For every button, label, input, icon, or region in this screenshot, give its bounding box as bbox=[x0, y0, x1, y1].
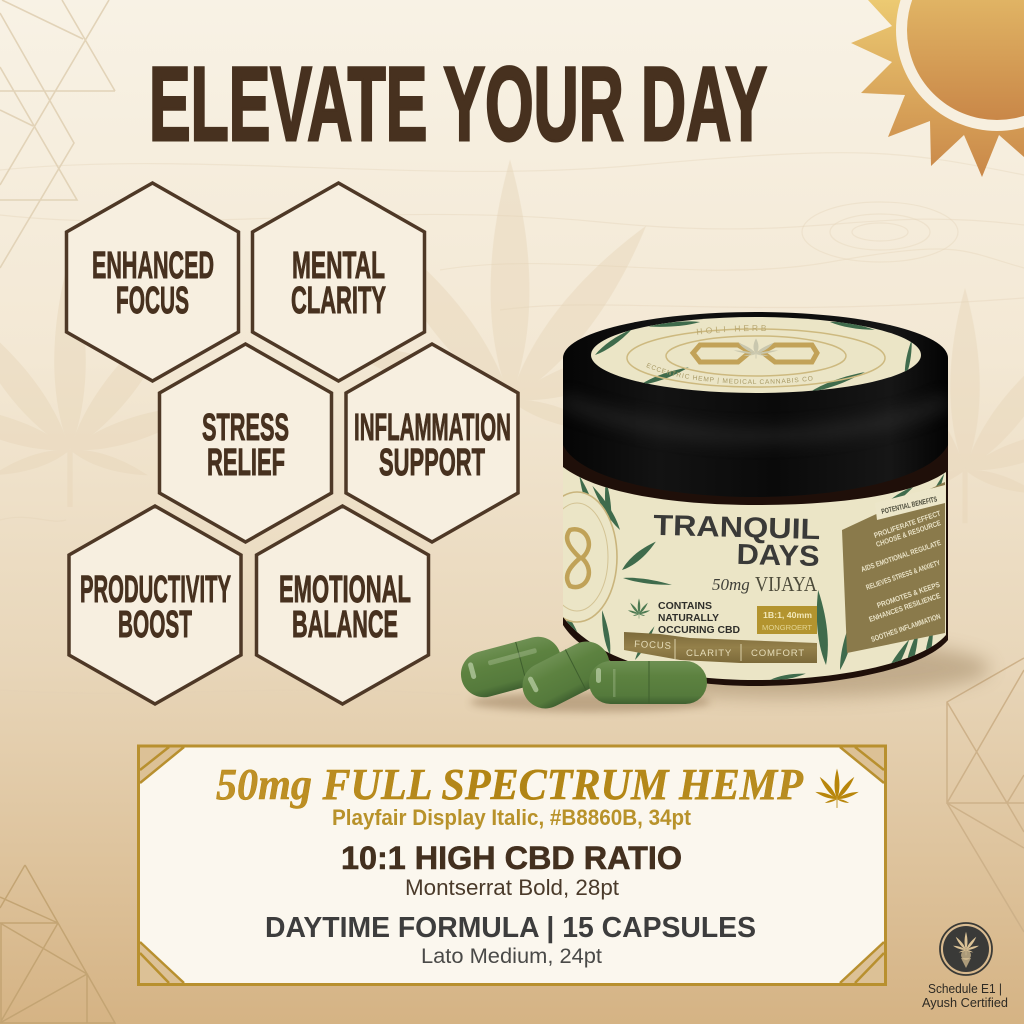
capsule 1 bbox=[456, 632, 566, 702]
jar shadow bbox=[570, 638, 990, 698]
cbd note: OCCURING CBD bbox=[658, 625, 740, 636]
jar label bbox=[559, 467, 947, 692]
cbd note bbox=[628, 598, 740, 636]
geometric lines: top left bbox=[0, 0, 115, 268]
strength line: 50mg bbox=[712, 575, 750, 594]
ratio line: 10:1 HIGH CBD RATIO bbox=[341, 840, 682, 876]
capsule 2 bbox=[515, 634, 617, 716]
geometric lines: bottom left bbox=[0, 865, 115, 1023]
jar glass body bbox=[563, 445, 948, 686]
hexagon: productivity boost: BOOST bbox=[118, 604, 192, 646]
panel frame bbox=[138, 746, 886, 984]
hexagon: stress relief bbox=[160, 344, 332, 542]
icon: gold hemp leaf bbox=[815, 768, 859, 808]
gold ratio box bbox=[757, 606, 817, 634]
formula line: DAYTIME FORMULA | 15 CAPSULES bbox=[265, 912, 756, 944]
certification badge: Schedule E1 | bbox=[928, 982, 1002, 996]
hexagon: inflammation support: SUPPORT bbox=[379, 442, 485, 484]
certification badge bbox=[922, 923, 1008, 1010]
product name: TRANQUIL bbox=[653, 510, 821, 546]
product jar bbox=[563, 312, 948, 686]
hexagon: emotional balance: BALANCE bbox=[292, 604, 398, 646]
hexagon: stress relief: RELIEF bbox=[207, 442, 285, 484]
potential benefits panel: PROMOTES & KEEPS bbox=[876, 580, 941, 610]
label seal bbox=[563, 491, 618, 623]
hexagon: emotional balance bbox=[256, 506, 428, 704]
capsule 3 bbox=[589, 661, 707, 704]
hexagon: productivity boost bbox=[69, 506, 241, 704]
caption: ratio font: Montserrat Bold, 28pt bbox=[405, 875, 619, 900]
potential benefits panel: PROLIFERATE EFFECT bbox=[873, 508, 942, 540]
icon: sun bbox=[851, 0, 1024, 177]
hexagon: inflammation support: INFLAMMATION bbox=[354, 407, 511, 449]
product name bbox=[652, 510, 821, 573]
potential benefits panel: ENHANCES RESILIENCE bbox=[868, 591, 942, 624]
potential benefits panel: RELIEVES STRESS & ANXIETY bbox=[865, 558, 941, 592]
potential benefits panel bbox=[842, 482, 945, 653]
potential benefits panel: AIDS EMOTIONAL REGULATE bbox=[860, 538, 942, 574]
lid seal: ECCENTRIC HEMP | MEDICAL CANNABIS CO bbox=[646, 362, 812, 384]
caption: formula font: Lato Medium, 24pt bbox=[421, 945, 602, 968]
caption: headline font: Playfair Display Italic, #B8860B, 34pt bbox=[332, 805, 692, 830]
geometric lines: right bbox=[947, 658, 1024, 932]
strength line: VIJAYA bbox=[755, 572, 818, 596]
hexagon: mental clarity bbox=[252, 183, 424, 381]
hexagon: enhanced focus bbox=[66, 183, 238, 381]
potential benefits panel: SOOTHES INFLAMMATION bbox=[870, 612, 942, 644]
potential benefits panel: POTENTIAL BENEFITS bbox=[880, 494, 938, 516]
hexagon: stress relief: STRESS bbox=[202, 407, 289, 449]
hexagon: inflammation support bbox=[346, 344, 518, 542]
gold ratio box: 1B:1, 40mm bbox=[763, 610, 812, 620]
cbd note: NATURALLY bbox=[658, 613, 719, 624]
gold ratio box: MONGROERT bbox=[762, 625, 813, 632]
hexagon: enhanced focus: FOCUS bbox=[116, 280, 189, 322]
benefit strip: FOCUS bbox=[634, 639, 672, 652]
headline: 50mg FULL SPECTRUM HEMP bbox=[216, 760, 804, 809]
benefit strip: COMFORT bbox=[751, 648, 805, 659]
benefit strip bbox=[624, 632, 817, 663]
info panel bbox=[138, 746, 886, 984]
potential benefits panel: CHOOSE & RESOURCE bbox=[875, 518, 942, 549]
benefit strip: CLARITY bbox=[686, 648, 732, 659]
lid seal: HOLI HERB bbox=[696, 325, 766, 335]
product name: DAYS bbox=[736, 539, 820, 573]
lid seal bbox=[626, 325, 886, 388]
capsules bbox=[456, 632, 710, 716]
certification badge: Ayush Certified bbox=[922, 996, 1008, 1010]
hexagon: mental clarity: MENTAL bbox=[292, 245, 385, 287]
jar lid bbox=[563, 312, 948, 497]
strength line bbox=[712, 572, 818, 596]
hexagon: emotional balance: EMOTIONAL bbox=[279, 569, 411, 611]
hexagon: productivity boost: PRODUCTIVITY bbox=[80, 569, 231, 611]
hexagon: mental clarity: CLARITY bbox=[291, 280, 386, 322]
cbd note: CONTAINS bbox=[658, 601, 712, 612]
hexagon: enhanced focus: ENHANCED bbox=[92, 245, 214, 287]
